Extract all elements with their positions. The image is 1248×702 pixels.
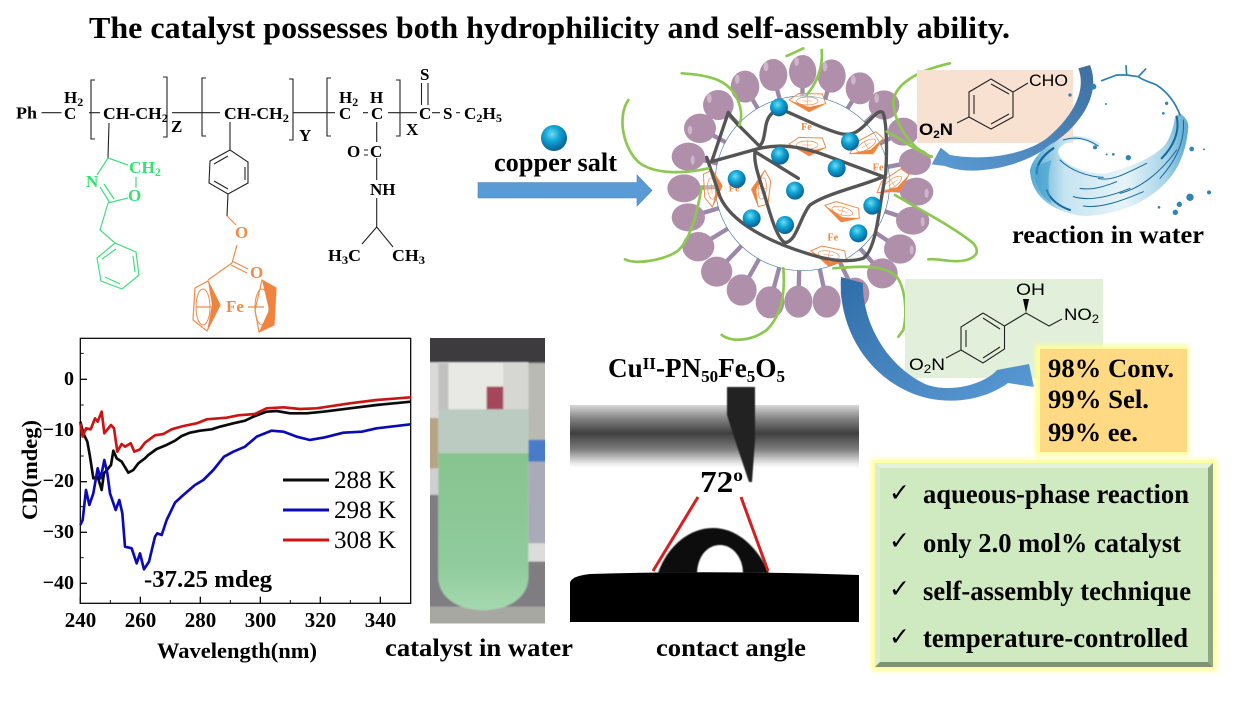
ferrocene units in core: Fe <box>873 163 884 174</box>
contact angle lines <box>653 497 768 571</box>
backbone atom labels: C <box>370 142 382 161</box>
backbone atom labels: 5 <box>496 111 502 125</box>
x axis tick labels: 260 <box>125 608 156 632</box>
green oxazoline unit: CH <box>129 158 154 177</box>
backbone atom labels: O <box>347 142 360 161</box>
stereo wedge <box>1023 299 1029 313</box>
NO2 label: 2 <box>1092 312 1099 326</box>
substrate panel: 4-nitrobenzaldehyde <box>917 70 1073 143</box>
polymer structure formula <box>16 65 502 332</box>
green oxazoline unit: 2 <box>155 165 161 179</box>
reaction in water label: reaction in water <box>1012 222 1204 249</box>
feature: only 2.0 mol% catalyst: only 2.0 mol% catalyst <box>923 528 1181 558</box>
backbone atom labels: C <box>64 104 76 123</box>
backbone atom labels: 2 <box>283 111 289 125</box>
substrate <box>570 572 859 622</box>
copper salt sphere <box>541 125 567 151</box>
curved arrow: micelle to product <box>841 277 1034 401</box>
backbone atom labels <box>16 65 502 267</box>
yield box <box>1035 345 1189 456</box>
y axis tick labels <box>43 368 74 594</box>
plot frame and ticks <box>80 338 411 603</box>
NO2 label: NO <box>1064 305 1090 324</box>
series: 298 K <box>80 424 411 569</box>
backbone atom labels: S <box>420 65 429 84</box>
backbone atom labels: H <box>328 246 341 265</box>
O2N label: 2 <box>924 362 932 376</box>
x axis tick labels: 300 <box>245 608 276 632</box>
product bonds <box>946 313 1062 363</box>
x axis title: Wavelength(nm) <box>157 638 317 663</box>
y axis tick labels: −30 <box>43 521 74 543</box>
backbone atom labels: X <box>406 120 419 139</box>
feature: only 2.0 mol% catalyst: ✓ <box>889 528 910 555</box>
ferrocene units in core: Fe <box>827 233 839 244</box>
head highlights <box>688 57 929 255</box>
backbone atom labels: Ph <box>16 104 38 122</box>
sample name: 50 <box>701 367 718 386</box>
angle value: 72 <box>700 464 731 499</box>
O2N label: O <box>919 120 932 139</box>
x axis tick labels: 240 <box>65 608 96 632</box>
ferrocene units in core <box>702 93 914 269</box>
sample name: -PN <box>656 353 702 383</box>
legend: 298 K <box>334 497 396 524</box>
y axis tick labels: 0 <box>64 368 74 390</box>
enantiomeric excess: 99% ee. <box>1048 418 1138 447</box>
feature: self-assembly technique: ✓ <box>889 576 910 603</box>
backbone atom labels: C <box>339 104 351 123</box>
top spray <box>1102 66 1180 115</box>
sample name: O <box>755 353 776 383</box>
y axis tick labels: −20 <box>43 470 74 492</box>
sample name: 5 <box>747 367 755 386</box>
backbone atom labels: H <box>339 88 352 107</box>
legend <box>283 467 396 554</box>
feature: temperature-controlled: temperature-controlled <box>923 623 1188 653</box>
x axis tick labels: 340 <box>365 608 396 632</box>
OH label: OH <box>1016 280 1045 299</box>
ferrocene units in core: Fe <box>801 122 812 133</box>
backbone atom labels: Y <box>299 126 311 145</box>
green oxazoline unit <box>86 158 161 289</box>
water droplets <box>1064 84 1211 215</box>
backbone atom labels: S <box>443 104 452 123</box>
O2N label: N <box>931 355 945 374</box>
x axis tick labels: 280 <box>185 608 216 632</box>
green oxazoline unit: N <box>86 172 99 191</box>
caption: contact angle <box>656 635 806 662</box>
backbone atom labels: C <box>464 104 476 123</box>
backbone atom labels: C <box>371 104 383 123</box>
title: The catalyst possesses both hydrophilicity and self-assembly ability. <box>89 10 1010 45</box>
backbone atom labels: 2 <box>77 95 83 109</box>
y axis title: CD(mdeg) <box>17 420 42 520</box>
backbone atom labels: CH-CH <box>103 104 160 123</box>
x axis tick labels: 320 <box>305 608 336 632</box>
CD spectrum chart <box>17 338 411 663</box>
water splash <box>1030 66 1211 216</box>
backbone atom labels: CH <box>392 246 418 265</box>
y axis tick labels: −40 <box>43 572 74 594</box>
backbone atom labels: H <box>483 104 496 123</box>
micelle core <box>715 96 890 271</box>
x axis tick labels <box>65 608 396 632</box>
orange ferrocene ester unit: O <box>235 223 248 242</box>
test tube <box>438 362 528 610</box>
selectivity: 99% Sel. <box>1048 385 1149 414</box>
backbone atom labels: 2 <box>352 95 358 109</box>
conversion: 98% Conv. <box>1048 354 1174 383</box>
grey background band <box>570 405 859 468</box>
backbone atom labels: H <box>64 88 77 107</box>
CHO label: CHO <box>1029 71 1068 90</box>
legend: 308 K <box>334 527 396 554</box>
self-assembled micelle <box>622 48 977 340</box>
y axis tick labels: −10 <box>43 419 74 441</box>
feature: aqueous-phase reaction: ✓ <box>889 480 910 507</box>
product panel: nitroalcohol <box>905 279 1103 378</box>
feature: self-assembly technique: self-assembly technique <box>923 576 1191 606</box>
backbone atom labels: NH <box>370 180 396 199</box>
copper spheres <box>728 98 881 242</box>
water drop <box>658 528 769 573</box>
angle value: o <box>733 465 743 485</box>
sample name: II <box>643 354 656 373</box>
green oxazoline unit: O <box>128 186 141 205</box>
sample name: Fe <box>718 353 747 383</box>
backbone atom labels: Z <box>171 117 182 136</box>
micelle stalks <box>684 72 917 302</box>
photo caption: catalyst in water <box>385 635 573 662</box>
backbone atom labels: 3 <box>419 253 425 267</box>
series: 288 K <box>80 402 411 490</box>
contact angle panel <box>570 353 859 662</box>
polymer chain <box>707 110 887 261</box>
orange ferrocene ester unit <box>193 216 276 332</box>
orange ferrocene ester unit: O <box>250 263 263 282</box>
needle <box>727 387 755 482</box>
O2N label: N <box>940 120 953 139</box>
feature box <box>871 459 1217 671</box>
left splash tint <box>1035 160 1052 203</box>
micelle purple heads <box>667 55 933 318</box>
series: 308 K <box>80 397 411 452</box>
curved arrow: substrate into micelle <box>932 65 1093 171</box>
peak annotation: -37.25 mdeg <box>144 567 272 593</box>
green hydrophilic chains <box>622 48 977 340</box>
backbone atom labels: C <box>348 246 361 265</box>
legend: 288 K <box>334 467 396 494</box>
orange ferrocene ester unit: Fe <box>226 297 244 316</box>
catalyst in water photo <box>430 338 545 624</box>
splash streaks <box>1037 117 1184 210</box>
splash body <box>1030 113 1188 216</box>
backbone atom labels: 2 <box>162 111 168 125</box>
O2N label: 2 <box>933 129 940 141</box>
benzaldehyde bonds <box>957 79 1028 129</box>
sample name: Cu <box>608 353 643 383</box>
backbone atom labels: CH-CH <box>224 104 281 123</box>
polymer backbone bonds and brackets <box>42 77 460 247</box>
feature: aqueous-phase reaction: aqueous-phase reaction <box>923 479 1189 509</box>
copper salt label: copper salt <box>494 148 617 177</box>
feature: temperature-controlled: ✓ <box>889 624 910 651</box>
backbone atom labels: H <box>370 88 383 107</box>
backbone atom labels: 3 <box>342 253 348 267</box>
backbone atom labels: 2 <box>476 111 483 125</box>
O2N label: O <box>909 355 922 374</box>
backbone atom labels: C <box>419 104 431 123</box>
arrow: copper salt to micelle <box>478 175 652 206</box>
ferrocene units in core: Fe <box>729 184 740 195</box>
sample name: 5 <box>776 367 785 386</box>
